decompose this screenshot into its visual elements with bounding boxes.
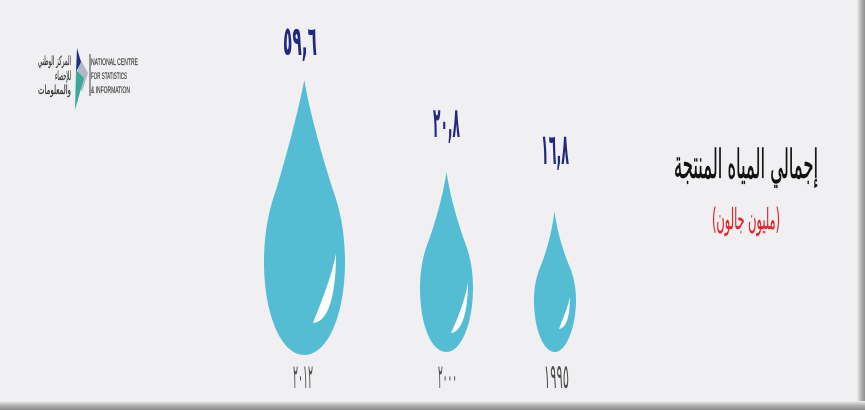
logo: National Centre for Statistics and Information (38, 48, 138, 110)
infographic canvas: ٢٠١٢ (293, 357, 313, 397)
logo Arabic name (38, 53, 71, 98)
logo English name (91, 57, 138, 95)
logo: National Centre for Statistics and Information: للإحصاء (55, 68, 71, 83)
logo English name: FOR STATISTICS (91, 71, 127, 81)
logo English name: & INFORMATION (91, 85, 130, 95)
drop 2012 (264, 80, 345, 355)
logo: National Centre for Statistics and Information: المركز الوطني (38, 53, 71, 69)
infographic canvas: ٢٠,٨ (433, 98, 460, 147)
logo English name: NATIONAL CENTRE (91, 57, 138, 67)
infographic canvas: ١٩٩٥ (544, 357, 569, 397)
infographic canvas: ١٦,٨ (541, 125, 569, 175)
logo Arabic name: والمعلومات (38, 82, 71, 98)
drop 2000 (420, 172, 473, 352)
infographic canvas: ٥٩,٦ (283, 17, 317, 65)
drop 1995 (534, 211, 576, 352)
logo emblem (75, 48, 88, 110)
infographic canvas: ٢٠٠٠ (438, 357, 457, 397)
